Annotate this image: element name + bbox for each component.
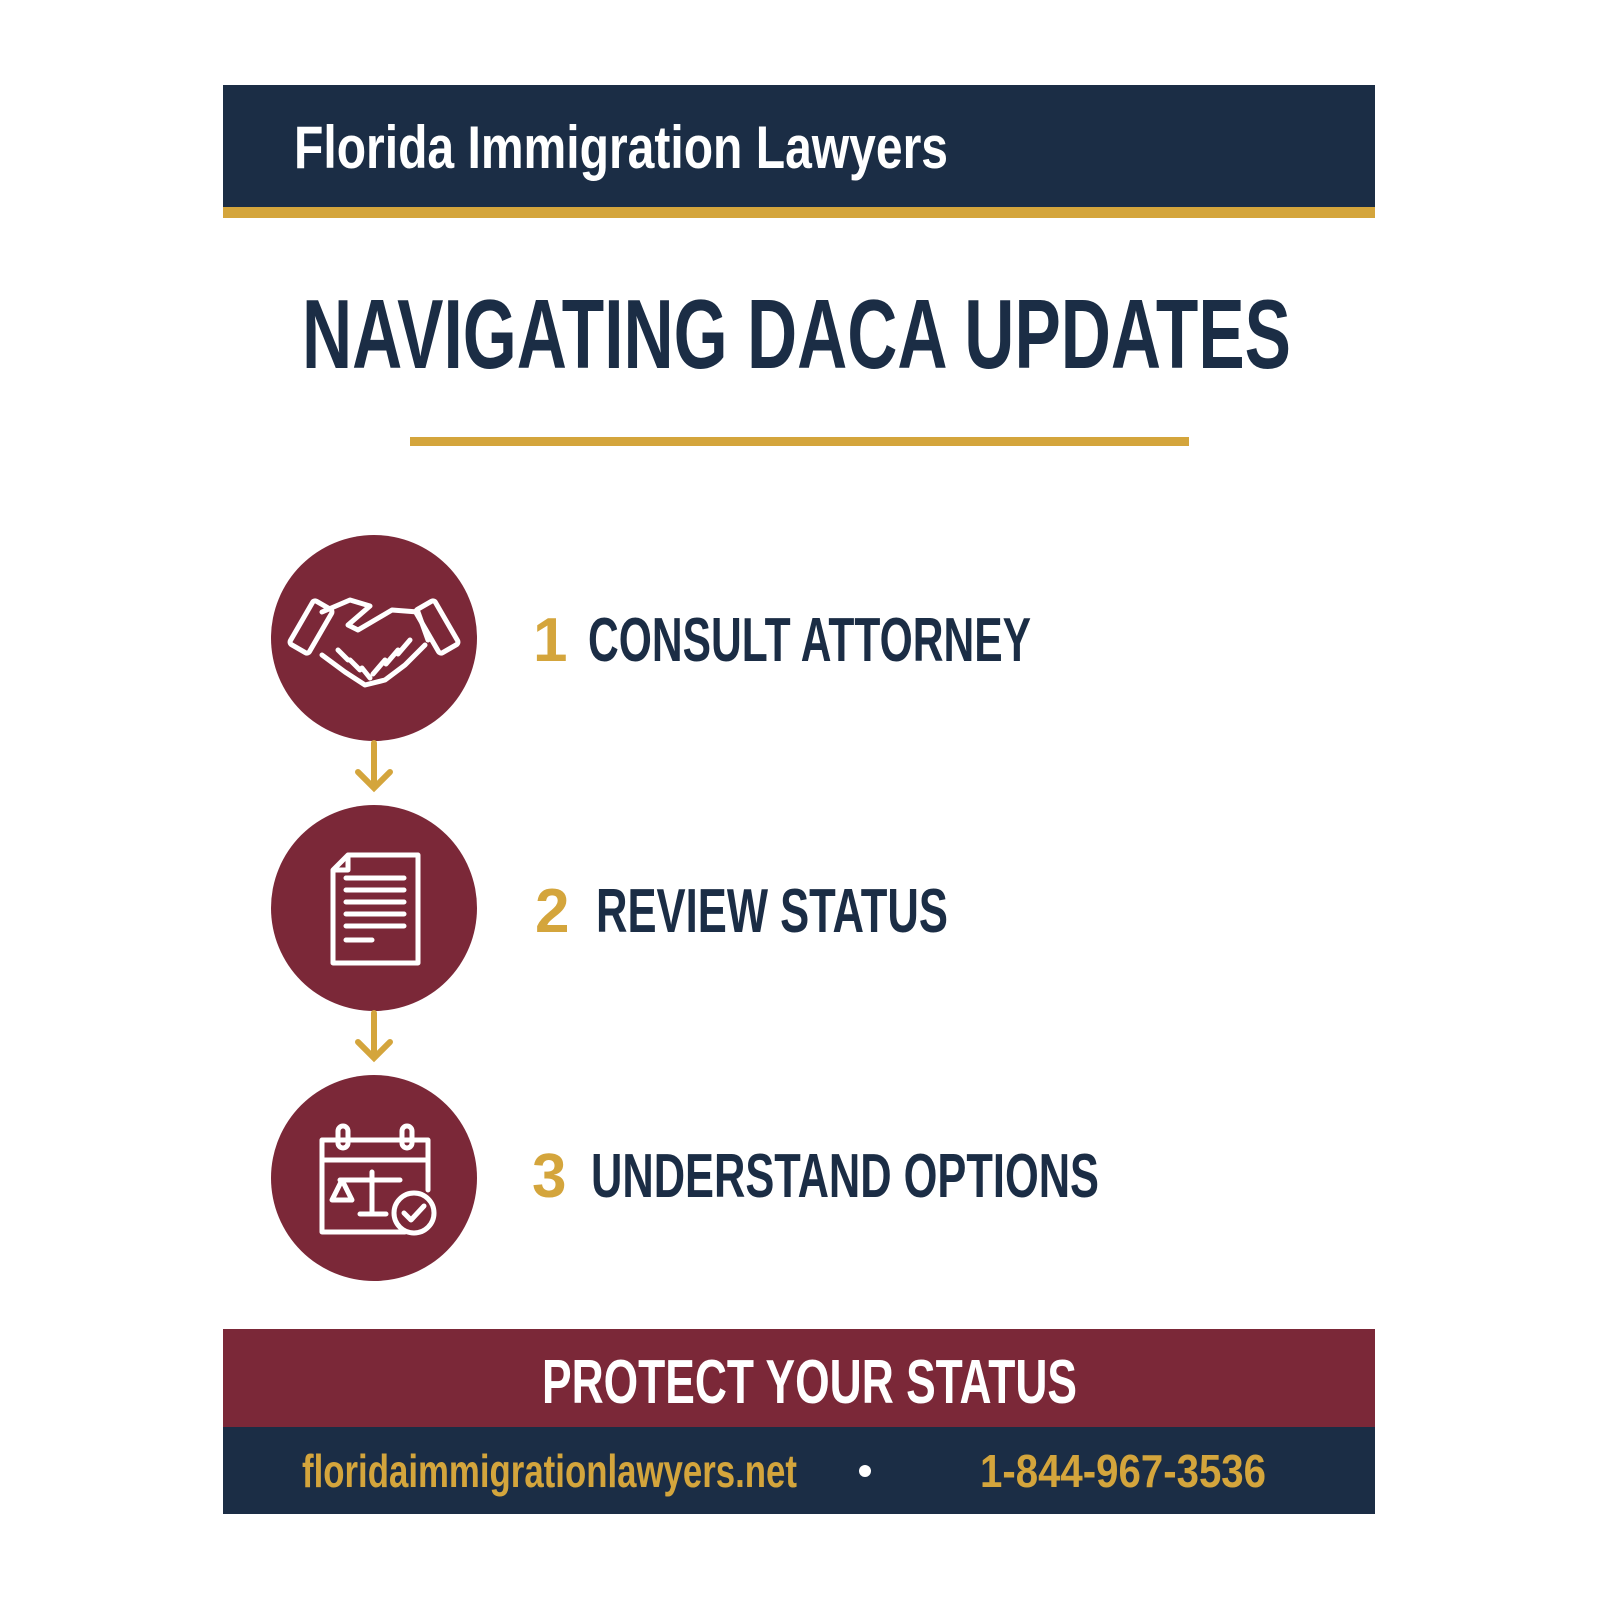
title underline	[410, 437, 1189, 446]
step 3: UNDERSTAND OPTIONS	[591, 1142, 1099, 1211]
arrow 1	[358, 743, 390, 788]
contact bar	[223, 1427, 1375, 1514]
step 2	[271, 805, 948, 1011]
footer banner	[223, 1329, 1375, 1427]
step 1 label: 1	[533, 606, 567, 675]
step 3	[271, 1075, 1099, 1281]
step 2 label: 2	[535, 877, 569, 946]
step 3 label: 3	[532, 1142, 566, 1211]
icon: handshake	[271, 535, 477, 741]
footer heading: PROTECT YOUR STATUS	[542, 1348, 1077, 1417]
header text: Florida Immigration Lawyers	[294, 114, 948, 181]
step 1: CONSULT ATTORNEY	[588, 606, 1031, 675]
icon: calendar with scale	[271, 1075, 477, 1281]
step 1	[271, 535, 1031, 741]
arrow 2	[358, 1013, 390, 1058]
icon: document	[271, 805, 477, 1011]
step 2: REVIEW STATUS	[596, 877, 948, 946]
website: floridaimmigrationlawyers.net	[302, 1445, 797, 1497]
header bar	[223, 85, 1375, 218]
phone: 1-844-967-3536	[980, 1445, 1266, 1497]
